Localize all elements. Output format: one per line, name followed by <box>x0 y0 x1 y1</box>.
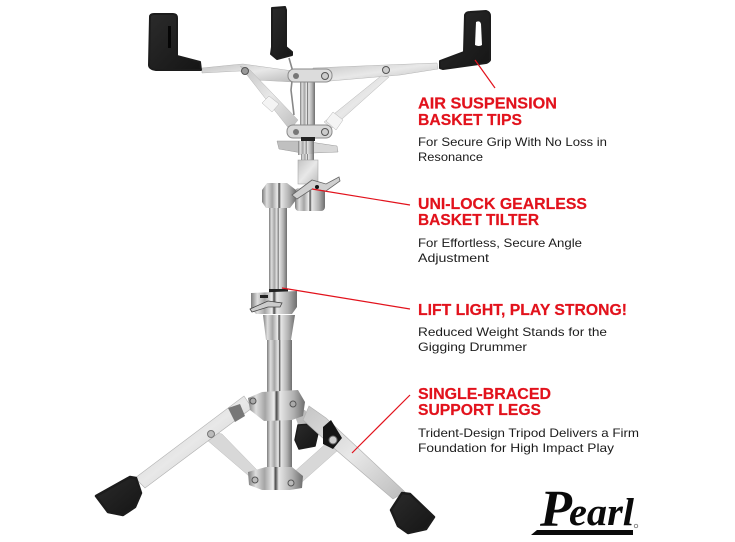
registered mark <box>634 524 638 528</box>
description: Trident-Design Tripod Delivers a Firm <box>418 426 639 440</box>
left foot <box>96 477 141 515</box>
heading line 2: BASKET TIPS <box>418 112 522 129</box>
right foot <box>391 493 434 533</box>
heading line 2: SUPPORT LEGS <box>418 402 541 419</box>
feature: single-braced support legs <box>418 386 639 455</box>
heading: UNI-LOCK GEARLESS <box>418 196 587 213</box>
description: Reduced Weight Stands for the <box>418 325 607 339</box>
heading: AIR SUSPENSION <box>418 96 557 112</box>
upper tube <box>269 208 287 293</box>
heading: LIFT LIGHT, PLAY STRONG! <box>418 302 627 319</box>
tilter <box>262 160 340 211</box>
lower leg hub <box>248 467 303 490</box>
feature: uni-lock gearless basket tilter <box>418 196 587 265</box>
left leg <box>96 396 257 515</box>
feature: air suspension basket tips <box>418 96 607 164</box>
wing nut <box>277 137 338 162</box>
feature: lift light, play strong <box>418 302 627 354</box>
rear leg and foot <box>292 408 318 449</box>
callout line: basket tips <box>475 60 495 88</box>
description line 2: Adjustment <box>418 251 490 265</box>
description line 2: Gigging Drummer <box>418 340 527 354</box>
lower tube <box>267 340 292 470</box>
Pearl logo <box>531 481 638 538</box>
callout line: tilter <box>312 189 410 205</box>
callout line: support legs <box>352 395 410 453</box>
basket tip: right <box>440 11 490 69</box>
cone collar <box>263 315 295 340</box>
description: For Secure Grip With No Loss in <box>418 135 607 149</box>
underline swash <box>531 530 633 535</box>
upper leg hub <box>248 390 305 421</box>
heading line 2: BASKET TILTER <box>418 212 539 229</box>
basket arms <box>202 63 438 130</box>
center post and wire <box>242 58 390 138</box>
description line 2: Foundation for High Impact Play <box>418 441 614 455</box>
wordmark letters: earl <box>569 491 634 534</box>
basket tip: center <box>271 7 292 59</box>
description line 2: Resonance <box>418 150 483 164</box>
basket tip: left <box>149 14 201 70</box>
wordmark initial: P <box>539 481 573 538</box>
height clamp <box>250 289 297 314</box>
heading: SINGLE-BRACED <box>418 386 551 403</box>
snare stand <box>96 7 490 533</box>
description: For Effortless, Secure Angle <box>418 236 582 250</box>
callout line: lift light <box>282 288 410 309</box>
right leg <box>293 406 434 533</box>
